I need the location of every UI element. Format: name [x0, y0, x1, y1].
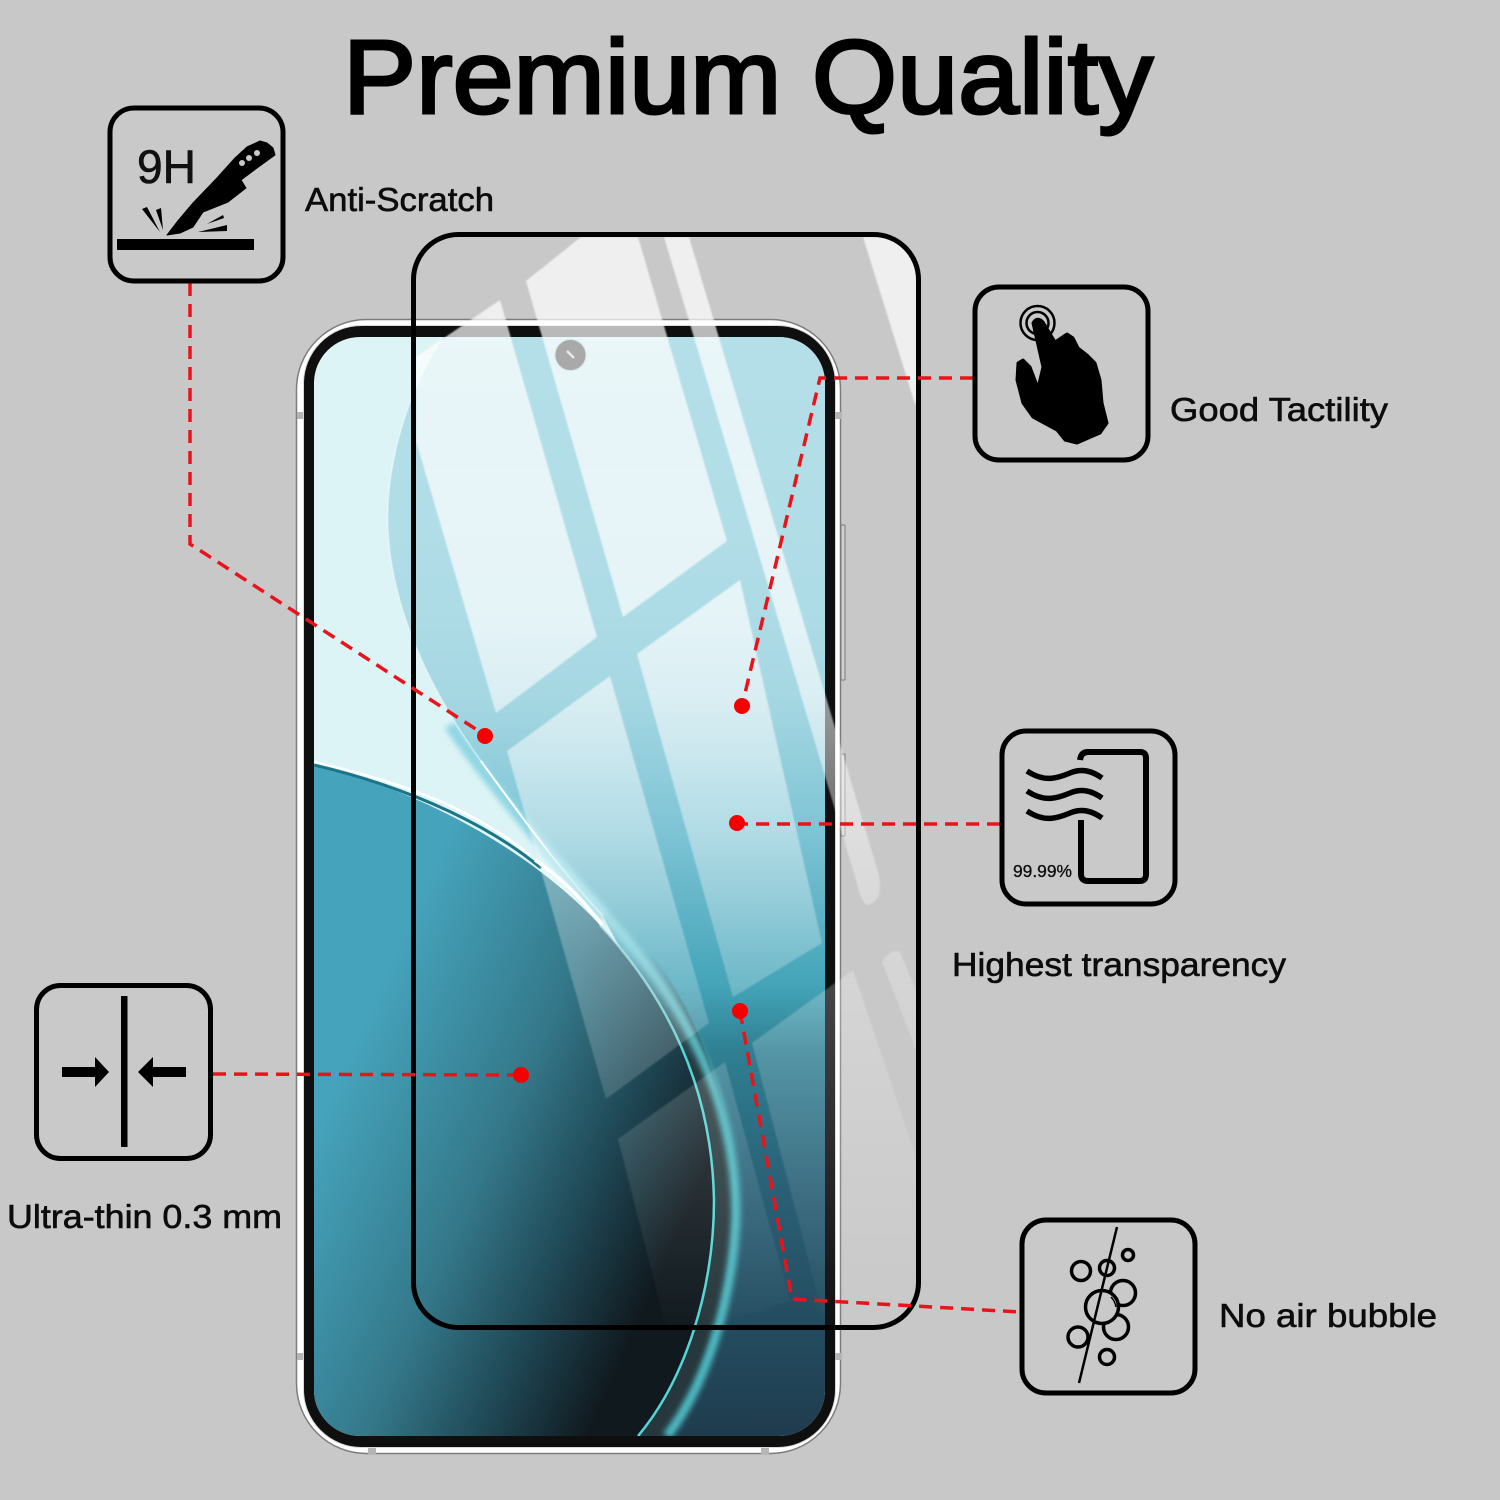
phone	[296, 320, 845, 1454]
icon: no air bubble	[1022, 1220, 1195, 1393]
antenna marks	[297, 412, 841, 1454]
wallpaper	[314, 337, 826, 1436]
icon: transparency: 99.99%	[1013, 861, 1072, 881]
leader: anti-scratch	[190, 283, 493, 744]
label: good tactility: Good Tactility	[1170, 391, 1389, 428]
icon: touch hand	[975, 287, 1148, 460]
camera hole	[555, 340, 586, 370]
phone frame	[296, 320, 840, 1454]
leader: good tactility	[734, 378, 973, 714]
glass protector outline	[414, 234, 918, 1328]
label: highest transparency: Highest transparency	[952, 946, 1287, 983]
icon: 9H knife	[110, 108, 283, 281]
leader: no air bubble	[732, 1003, 1020, 1312]
title: Premium Quality	[343, 19, 1154, 136]
icon: transparency	[1002, 731, 1175, 904]
label: ultra-thin: Ultra-thin 0.3 mm	[7, 1198, 282, 1235]
label: no air bubble: No air bubble	[1219, 1297, 1437, 1334]
side buttons	[841, 525, 845, 836]
glass reflections	[416, 237, 916, 1280]
leader: highest transparency	[729, 815, 1000, 831]
icon: ultra-thin	[36, 986, 210, 1158]
phone bezel	[304, 326, 836, 1448]
label: anti-scratch: Anti-Scratch	[305, 181, 494, 218]
leader: ultra-thin	[213, 1067, 529, 1083]
icon: 9H knife: 9H	[137, 140, 196, 193]
